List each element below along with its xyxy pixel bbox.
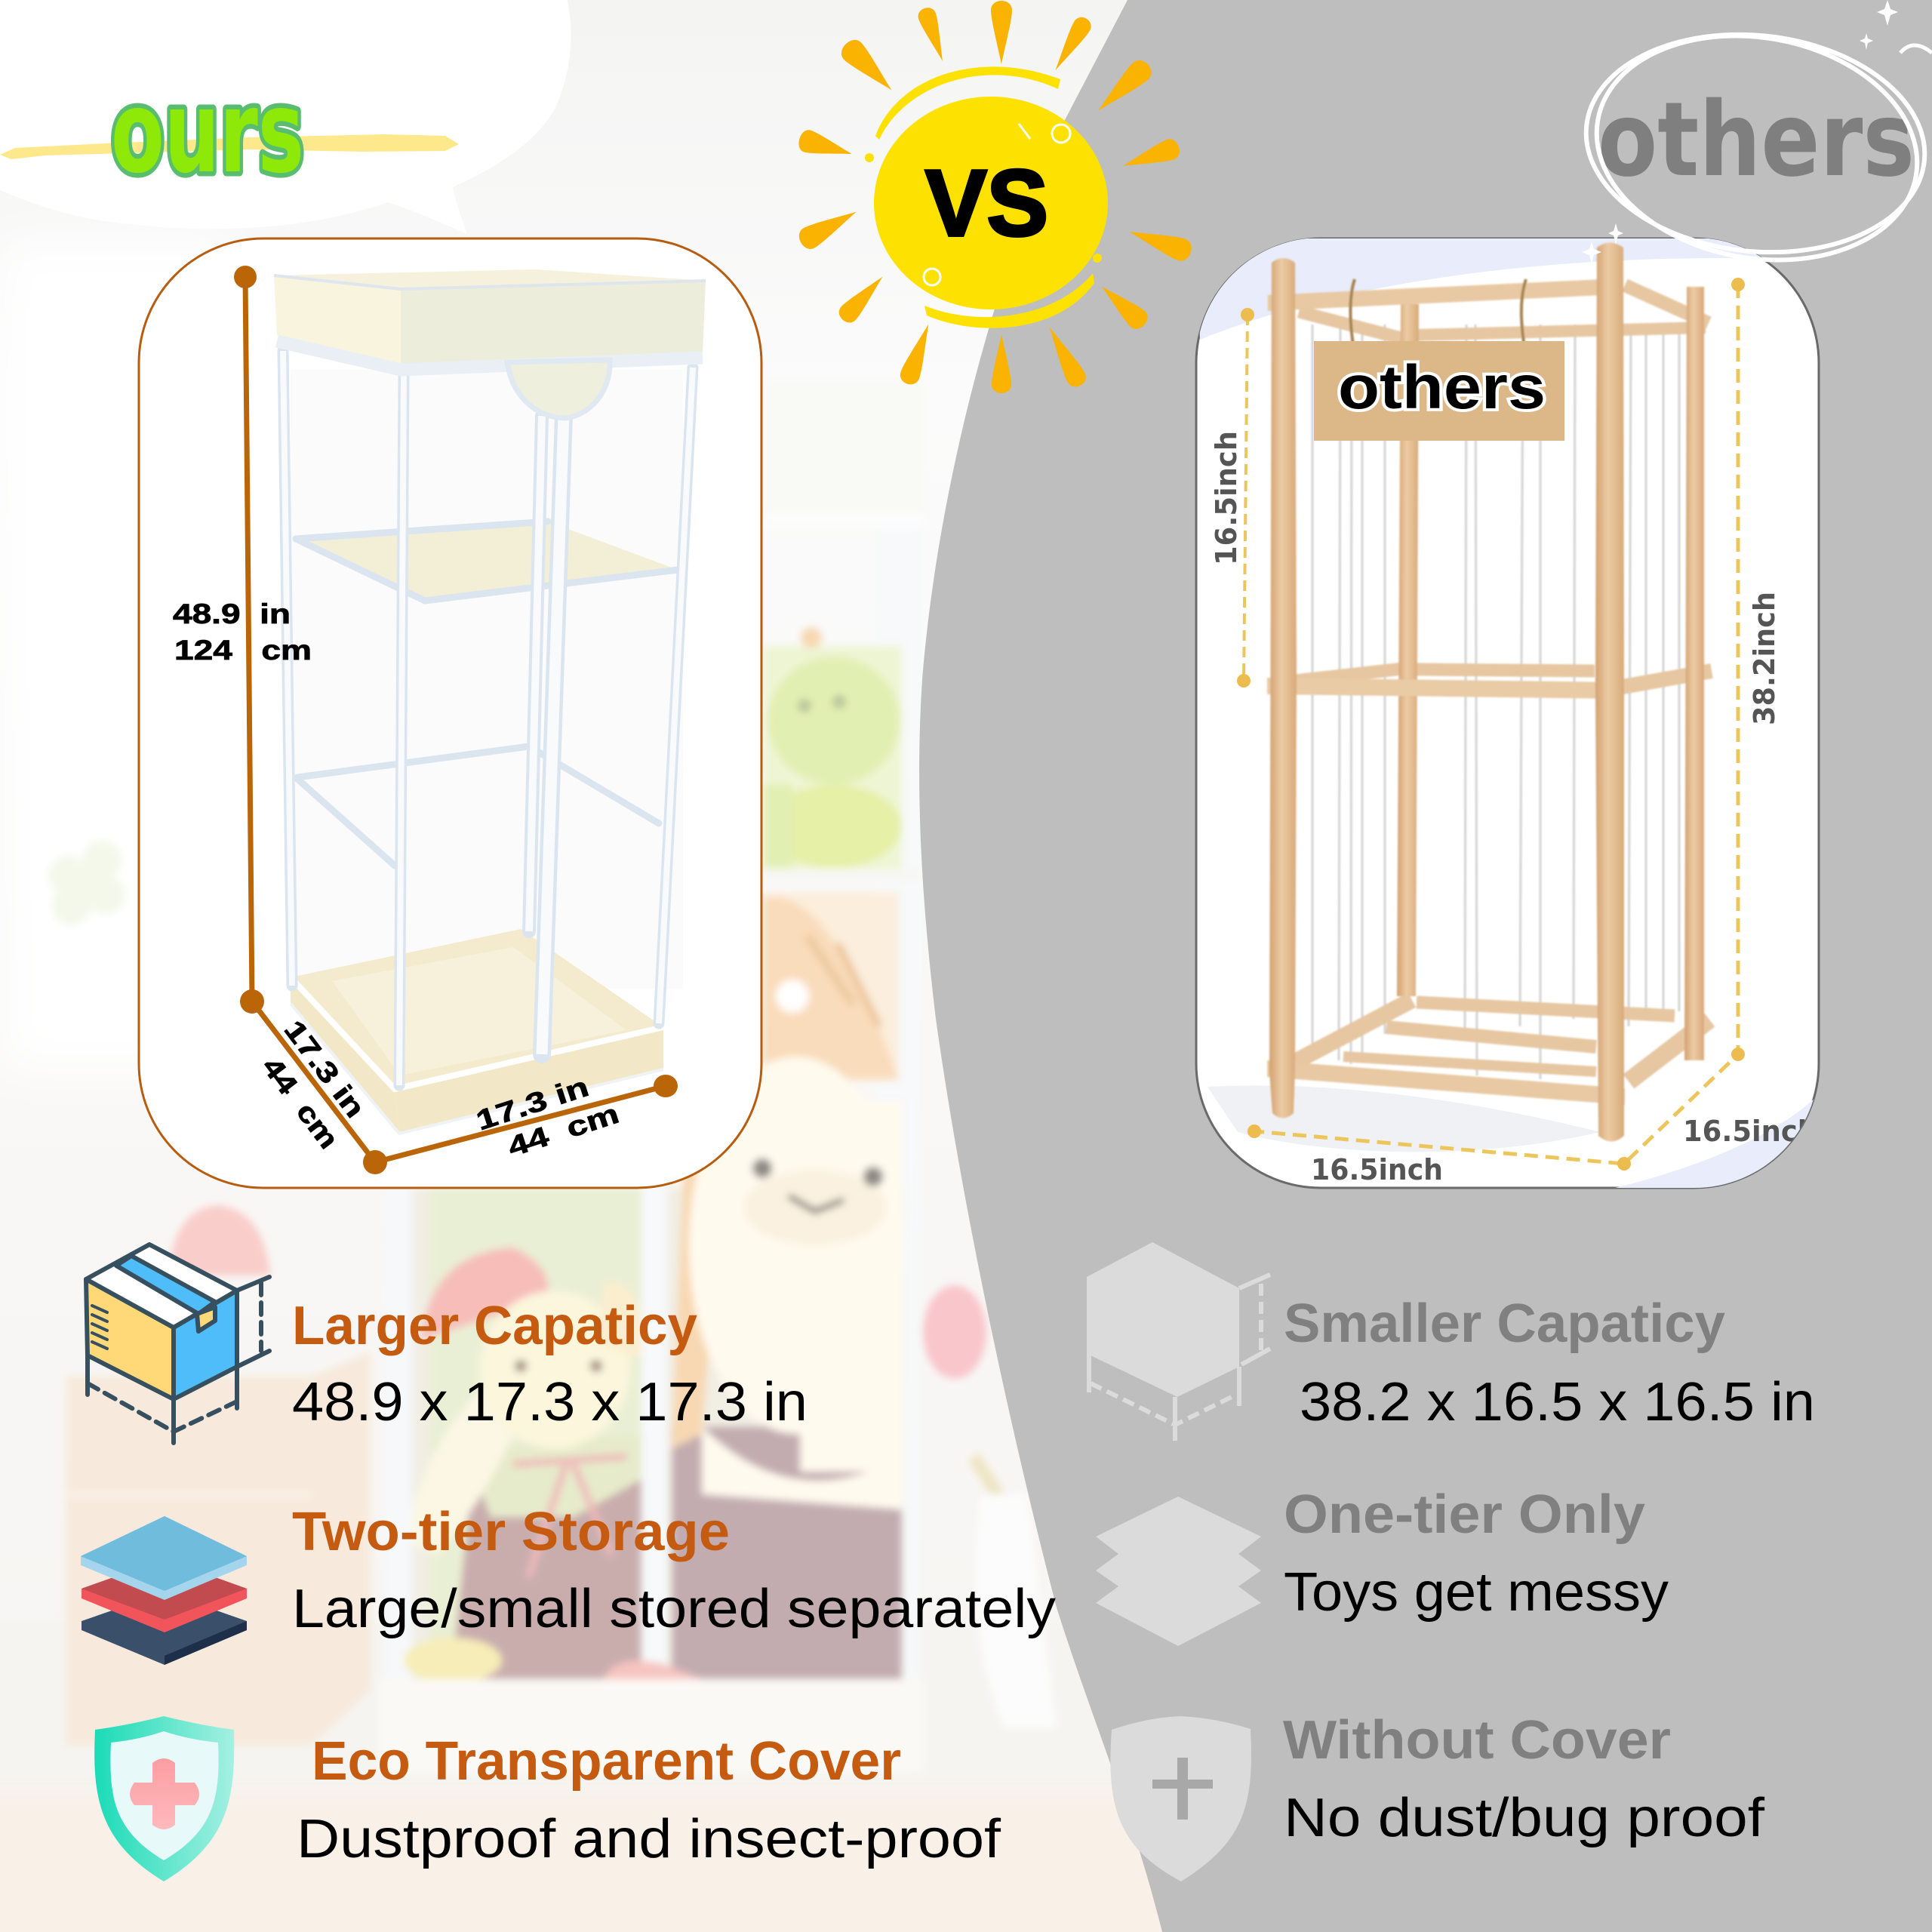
dimension labels: 44 cm (257, 1051, 345, 1155)
icon: grey box (1087, 1242, 1270, 1441)
panel: ours product photo (139, 238, 761, 1188)
dimension labels: 17.3 in (278, 1014, 371, 1124)
product: transparent two-tier storage case (274, 269, 706, 1134)
feature: two-tier storage (81, 1502, 1056, 1665)
icon: box with dimensions (86, 1244, 269, 1443)
dimension labels: 48.9 in (173, 598, 291, 629)
feature: without cover (1110, 1710, 1765, 1881)
detail: Large/small stored separately (292, 1579, 1056, 1639)
dimension labels: 16.5inch (1210, 431, 1243, 565)
detail: 48.9 x 17.3 x 17.3 in (292, 1372, 808, 1432)
detail: Dustproof and insect-proof (297, 1809, 1001, 1869)
heading: Smaller Capaticy (1284, 1294, 1725, 1354)
detail: 38.2 x 16.5 x 16.5 in (1300, 1372, 1815, 1432)
feature: larger capacity (86, 1244, 808, 1443)
tiger toy (763, 892, 899, 1081)
sun body (874, 97, 1108, 309)
dimension labels (173, 598, 623, 1163)
dimension labels: 17.3 in (472, 1071, 592, 1137)
VS text: VS (925, 152, 1048, 256)
lower case interior (412, 1188, 903, 1686)
feature: eco transparent cover (94, 1716, 1001, 1881)
others: wooden cage rack (1267, 243, 1712, 1141)
feature: one-tier only (1096, 1484, 1669, 1646)
sun rays (795, 1, 1195, 393)
panel: others product photo (1196, 238, 1819, 1188)
gold dashed dimension lines (1237, 278, 1745, 1171)
heading: ours with yellow brush stroke (0, 67, 459, 198)
dimension labels: 16.5inch (1311, 1153, 1443, 1186)
detail: No dust/bug proof (1284, 1788, 1765, 1848)
dimension lines (234, 266, 678, 1174)
cactus toy shelf (763, 646, 902, 875)
heading: Two-tier Storage (292, 1502, 730, 1562)
dimension labels: 16.5inch (1683, 1115, 1817, 1148)
feature: smaller capacity (1087, 1242, 1815, 1441)
hanging sign with others (1314, 341, 1564, 441)
VS sun badge (795, 1, 1195, 393)
icon: stacked layers (81, 1516, 247, 1665)
heading: One-tier Only (1284, 1484, 1645, 1545)
speech bubble behind ours label (0, 0, 571, 234)
dimension labels (1210, 431, 1817, 1186)
dimension labels: 38.2inch (1748, 592, 1781, 725)
heading: ours with yellow brush stroke: ours (111, 67, 304, 198)
heading: Larger Capaticy (292, 1296, 697, 1356)
dimension labels: 124 cm (174, 635, 312, 666)
dimension labels: 44 cm (504, 1098, 623, 1163)
detail: Toys get messy (1284, 1562, 1669, 1623)
sparkles (1582, 0, 1932, 264)
heading: Without Cover (1283, 1710, 1671, 1770)
icon: shield with cross (94, 1716, 234, 1881)
heading: others with hand drawn circle (1575, 0, 1932, 285)
grey comparison side panel background (919, 0, 1932, 1932)
lavender backdrop swooshes (1196, 238, 1819, 340)
icon: grey shield (1110, 1716, 1251, 1881)
flower and vase (923, 1285, 986, 1379)
hanging sign with others: others (1338, 353, 1546, 422)
heading: Eco Transparent Cover (312, 1731, 901, 1792)
icon: grey layers (1096, 1497, 1261, 1646)
